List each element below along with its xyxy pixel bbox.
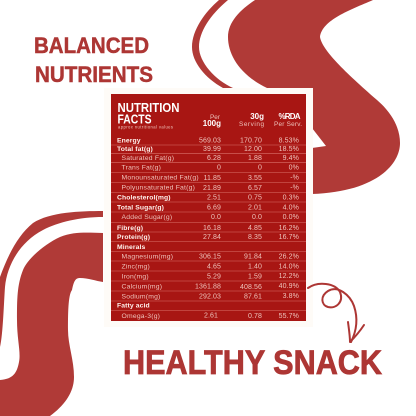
values per 100g: 6.28 <box>207 155 221 162</box>
values percent RDA per serving: 9.4% <box>283 155 299 162</box>
values percent RDA per serving: 16.2% <box>279 225 299 232</box>
values per 30g serving: 0.75 <box>248 194 262 201</box>
values per 30g serving: 4.85 <box>248 225 262 232</box>
row labels: Minerals <box>117 244 145 251</box>
column headers: 100g <box>203 119 221 128</box>
heading: balanced nutrients: BALANCED <box>34 33 149 58</box>
column headers: Per Serv. <box>274 121 302 128</box>
decorative swoosh: bottom left large shape <box>0 233 103 416</box>
heading: healthy snack: HEALTHY SNACK <box>123 344 382 382</box>
row labels: Iron(mg) <box>122 273 149 280</box>
row dividers <box>111 145 306 310</box>
values per 30g serving: 1.59 <box>248 273 262 280</box>
values percent RDA per serving: 55.7% <box>279 313 299 320</box>
decorative swoosh: top right thin band <box>192 0 233 88</box>
column headers: 30g <box>250 112 264 121</box>
column headers: Serving <box>239 121 264 128</box>
column headers: %RDA <box>278 112 301 121</box>
values per 30g serving: 8.35 <box>248 234 262 241</box>
values percent RDA per serving: 18.5% <box>279 146 299 153</box>
values per 30g serving: 1.40 <box>248 263 262 270</box>
values per 30g serving: 3.55 <box>248 175 262 182</box>
icon: hand-drawn looping arrow <box>308 284 364 342</box>
values percent RDA per serving: 12.2% <box>279 273 299 280</box>
row labels: Omega-3(g) <box>122 313 160 320</box>
values per 100g: 0.0 <box>211 214 221 221</box>
row labels: Trans Fat(g) <box>122 165 161 172</box>
row labels: Sodium(mg) <box>122 293 161 300</box>
row labels: Polyunsaturated Fat(g) <box>122 185 195 192</box>
values percent RDA per serving: 16.7% <box>279 234 299 241</box>
values per 100g: 6.69 <box>207 204 221 211</box>
row labels: Monounsaturated Fat(g) <box>122 175 199 182</box>
decorative swoosh: left thin band <box>0 211 103 347</box>
row labels: Calcium(mg) <box>122 284 162 291</box>
values per 30g serving: 170.70 <box>240 137 262 144</box>
values per 100g: 27.84 <box>203 234 221 241</box>
values per 100g: 569.03 <box>199 137 221 144</box>
values per 100g: 0 <box>217 165 221 172</box>
values per 30g serving: 0 <box>258 165 262 172</box>
row labels: Magnesium(mg) <box>122 254 173 261</box>
nutrition facts card <box>104 88 313 327</box>
values per 30g serving: 2.01 <box>248 204 262 211</box>
values percent RDA per serving: 26.2% <box>279 254 299 261</box>
values percent RDA per serving: 8.53% <box>279 137 299 144</box>
values per 30g serving: 408.56 <box>240 284 262 291</box>
values percent RDA per serving: 4.0% <box>283 204 299 211</box>
column headers <box>203 112 302 128</box>
values percent RDA per serving: 14.0% <box>279 263 299 270</box>
values per 30g serving: 91.84 <box>244 254 262 261</box>
values per 30g serving: 12.00 <box>244 146 262 153</box>
row labels <box>117 137 199 320</box>
values per 100g: 11.85 <box>204 175 221 182</box>
table title: approx nutritional values <box>118 124 173 130</box>
row labels: Fatty acid <box>117 303 150 310</box>
values per 100g: 2.51 <box>207 194 221 201</box>
values per 30g serving <box>240 137 262 320</box>
decorative swoosh: top right large shape <box>228 0 400 194</box>
values per 100g: 2.61 <box>204 312 218 320</box>
values percent RDA per serving: -% <box>290 185 299 192</box>
values per 100g: 4.65 <box>207 263 221 270</box>
row labels: Fibre(g) <box>117 225 143 232</box>
row labels: Saturated Fat(g) <box>122 155 174 162</box>
row labels: Energy <box>117 137 141 144</box>
values per 100g: 306.15 <box>199 254 221 261</box>
values percent RDA per serving: 0% <box>289 165 299 172</box>
values per 30g serving: 0.78 <box>248 313 262 320</box>
values percent RDA per serving <box>279 137 299 320</box>
values per 30g serving: 6.57 <box>248 185 262 192</box>
values per 100g <box>195 137 221 320</box>
values per 30g serving: 0.0 <box>252 214 262 221</box>
values per 30g serving: 87.61 <box>244 293 262 300</box>
row labels: Protein(g) <box>117 234 150 241</box>
row labels: Added Sugar(g) <box>122 214 172 221</box>
values per 100g: 16.18 <box>203 225 221 232</box>
values per 100g: 39.99 <box>203 146 221 153</box>
values per 100g: 1361.88 <box>195 284 221 291</box>
row labels: Total fat(g) <box>117 146 153 153</box>
table title: NUTRITION <box>118 101 180 115</box>
values percent RDA per serving: -% <box>290 175 299 182</box>
values percent RDA per serving: 0.0% <box>283 214 299 221</box>
values per 30g serving: 1.88 <box>248 155 262 162</box>
table title <box>118 101 180 130</box>
row labels: Total Sugar(g) <box>117 204 164 211</box>
values percent RDA per serving: 3.8% <box>283 293 299 300</box>
values percent RDA per serving: 40.9% <box>279 283 299 290</box>
column headers: Per <box>210 114 221 121</box>
row labels: Cholesterol(mg) <box>117 194 171 201</box>
values per 100g: 21.89 <box>203 185 221 192</box>
heading: balanced nutrients <box>34 33 153 87</box>
row labels: Zinc(mg) <box>122 263 150 270</box>
table title: FACTS <box>118 112 152 126</box>
values per 100g: 5.29 <box>207 273 221 280</box>
values per 100g: 292.03 <box>199 293 221 300</box>
values percent RDA per serving: 0.3% <box>283 194 299 201</box>
heading: balanced nutrients: NUTRIENTS <box>35 62 153 87</box>
